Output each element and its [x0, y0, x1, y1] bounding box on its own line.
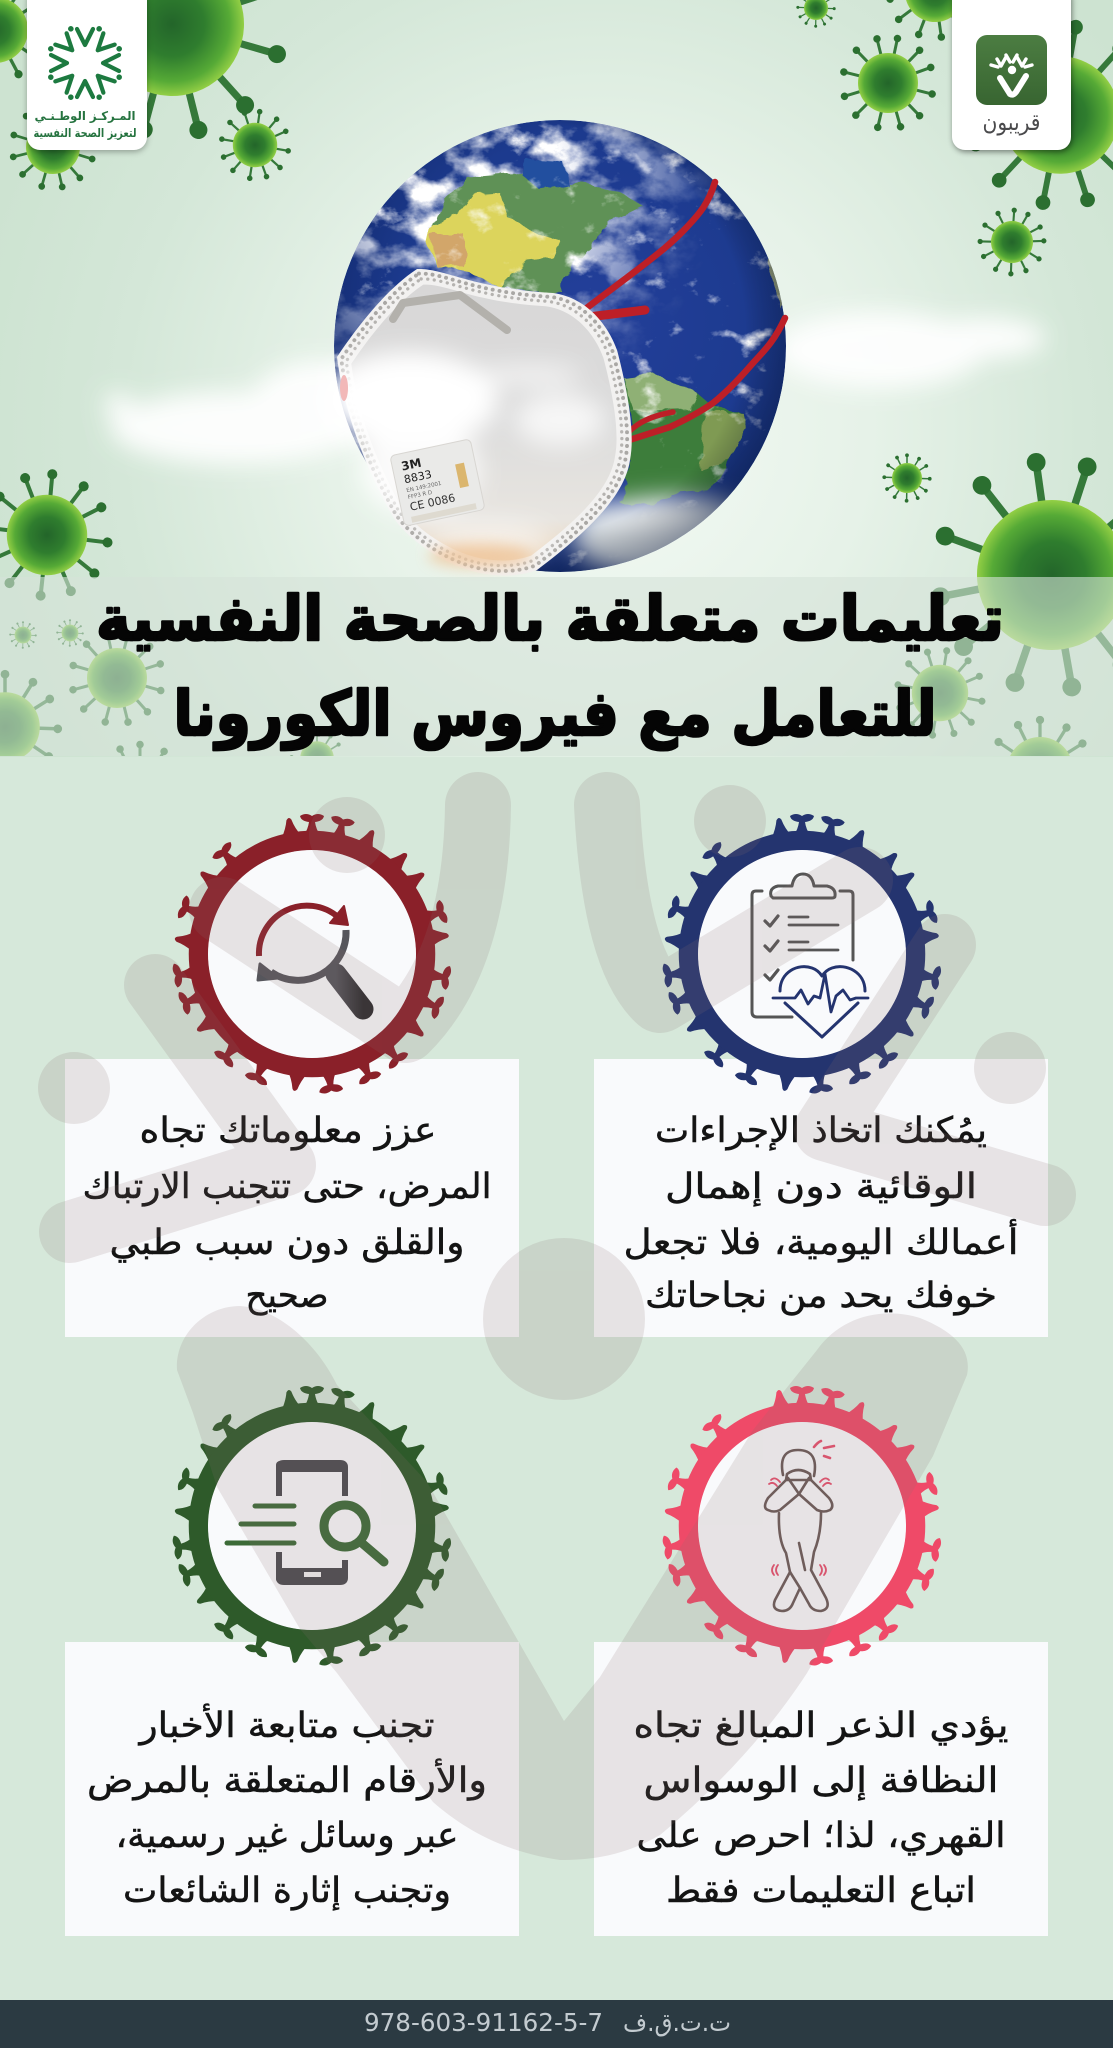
continents	[427, 160, 786, 507]
text: bottom left card	[87, 1703, 487, 1911]
footer text: ت.ت.ق.ف	[623, 2008, 731, 2037]
footer text: 978-603-91162-5-7	[364, 2008, 603, 2037]
panel: top left card	[65, 1059, 519, 1337]
globe	[334, 120, 786, 580]
title	[96, 582, 1004, 750]
app mark	[991, 55, 1032, 95]
text: top right card: أعمالك اليومية، فلا تجعل	[624, 1219, 1018, 1263]
text: top right card: الوقائية دون إهمال	[665, 1167, 977, 1207]
title band	[0, 577, 1113, 756]
watermark: large logo shapes	[38, 785, 1046, 1860]
text: top right card	[624, 1111, 1018, 1316]
title: تعليمات متعلقة بالصحة النفسية	[96, 582, 1004, 655]
text: bottom right card: النظافة إلى الوسواس	[644, 1761, 998, 1801]
mask valve label: 8833	[403, 468, 433, 486]
text: bottom right card: القهري، لذا؛ احرص على	[636, 1816, 1006, 1856]
text: top left card: صحيح	[246, 1276, 328, 1316]
footer bar	[0, 2000, 1113, 2048]
badge ring: pink	[662, 1386, 942, 1666]
text: bottom left card: والأرقام المتعلقة بالمرض	[87, 1758, 487, 1801]
title: للتعامل مع فيروس الكورونا	[174, 677, 936, 750]
logo: national center for mental health	[27, 0, 147, 150]
badge ring: dark green	[172, 1386, 452, 1666]
text: bottom left card: عبر وسائل غير رسمية،	[116, 1816, 458, 1856]
icon: clipboard with heart	[752, 874, 868, 1037]
lower page background	[0, 757, 1113, 2000]
background viruses	[0, 0, 1113, 839]
mask valve label: CE 0086	[409, 491, 456, 514]
mask valve label	[390, 439, 485, 526]
rosette mark	[46, 24, 124, 102]
logo: national center for mental health: لتعزيز الصحة النفسية	[34, 126, 136, 140]
mask valve label: 3M	[400, 456, 423, 474]
text: bottom right card	[634, 1706, 1008, 1911]
text: top left card: المرض، حتى تتجنب الارتباك	[82, 1167, 491, 1207]
icon: magnifier with arrows	[258, 906, 363, 1009]
text: top right card: خوفك يحد من نجاحاتك	[645, 1276, 997, 1316]
icon: anxious person	[765, 1441, 834, 1611]
mask clouds	[322, 352, 605, 558]
text: top right card: يمُكنك اتخاذ الإجراءات	[655, 1111, 987, 1151]
logo: qareeboon	[952, 0, 1071, 150]
mask valve label: FFP3 R D	[407, 490, 433, 501]
face mask	[322, 269, 632, 576]
fine cloud cover	[334, 120, 786, 572]
badge ring: maroon	[172, 814, 452, 1094]
header background	[0, 0, 1113, 757]
mask valve label: EN 149:2001	[406, 481, 442, 494]
logo: national center for mental health: المـركـز الوطـنـي	[34, 109, 136, 124]
text: top left card: والقلق دون سبب طبي	[110, 1223, 464, 1263]
panel: top right card	[594, 1059, 1048, 1337]
text: bottom right card: اتباع التعليمات فقط	[666, 1871, 976, 1911]
clouds behind globe	[104, 312, 1045, 464]
panel: bottom right card	[594, 1642, 1048, 1936]
text: bottom right card: يؤدي الذعر المبالغ تجاه	[634, 1706, 1008, 1746]
text: bottom left card: وتجنب إثارة الشائعات	[123, 1871, 451, 1911]
western cloud systems	[334, 120, 712, 356]
badge ring: navy	[662, 814, 942, 1094]
text: top left card: عزز معلوماتك تجاه	[140, 1111, 437, 1151]
text: top left card	[82, 1111, 491, 1316]
panel: bottom left card	[65, 1642, 519, 1936]
text: bottom left card: تجنب متابعة الأخبار	[137, 1703, 434, 1746]
footer text	[364, 2008, 731, 2037]
mask straps	[580, 182, 785, 442]
logo: qareeboon: قريبون	[982, 110, 1040, 136]
icon: phone with search	[227, 1461, 384, 1583]
